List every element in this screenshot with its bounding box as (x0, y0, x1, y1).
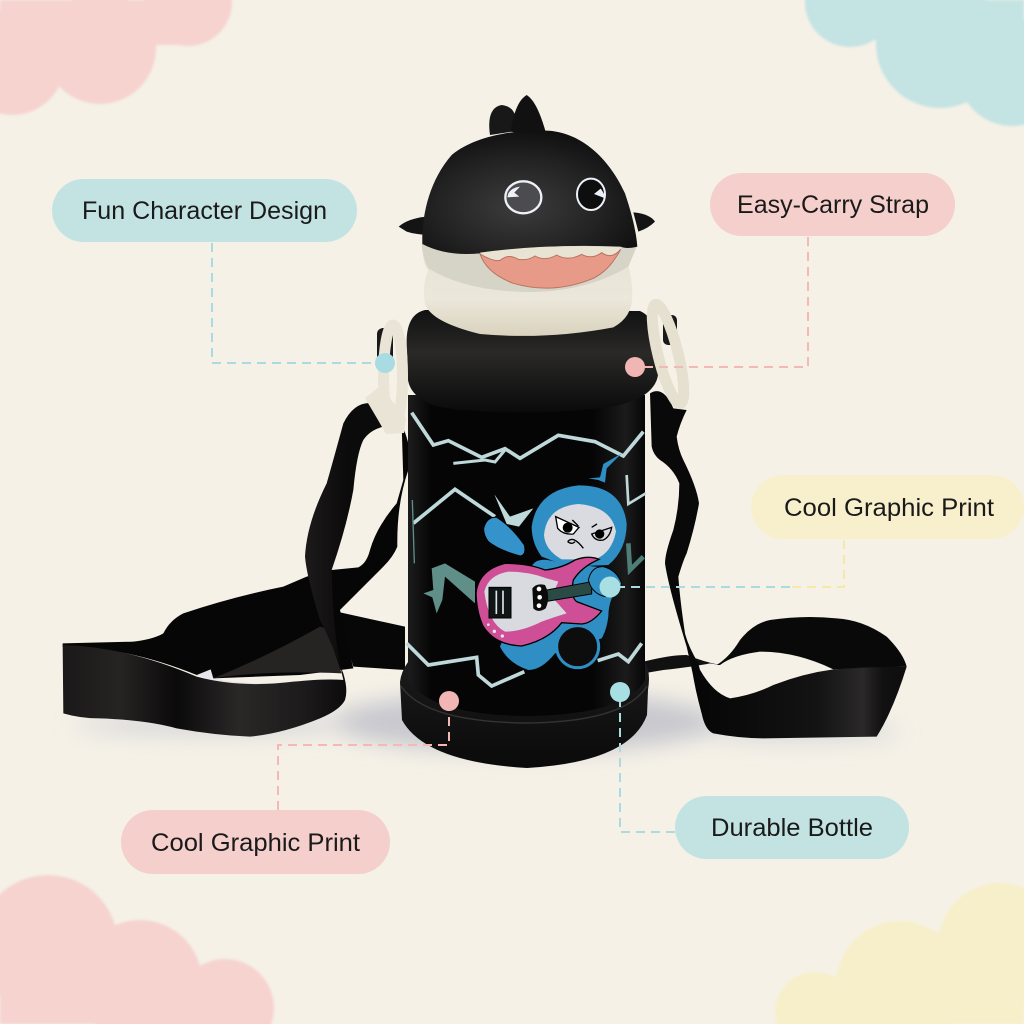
bottle body (401, 395, 647, 723)
face features (556, 517, 612, 548)
collar (407, 310, 659, 412)
jaw shade (422, 244, 637, 292)
right strap (643, 391, 907, 738)
left strap ring (365, 325, 406, 434)
cloud: top left (0, 0, 232, 115)
shark lid (399, 95, 655, 336)
foot ring (557, 626, 599, 668)
right strap ring (646, 302, 690, 406)
connector: easy-carry strap (635, 237, 808, 367)
mouth (480, 246, 621, 288)
blue arm (484, 517, 525, 556)
connector: cool graphic print left (278, 701, 449, 810)
callout: easy-carry strap (710, 173, 955, 236)
guitar (476, 557, 602, 646)
dome (422, 131, 637, 254)
small blue spark (588, 453, 622, 483)
callout: cool graphic print left: Cool Graphic Print (151, 829, 360, 857)
callout: easy-carry strap: Easy-Carry Strap (737, 191, 929, 219)
ground shadow (75, 692, 900, 752)
callout: fun character design: Fun Character Design (82, 197, 327, 225)
blue hood (532, 485, 627, 567)
lightning bolts (407, 413, 646, 686)
cream neck (422, 244, 637, 336)
hand (588, 567, 622, 597)
callout: fun character design (52, 179, 357, 242)
left eye (505, 181, 541, 213)
right eye (577, 179, 605, 210)
left strap (63, 403, 410, 737)
callout: cool graphic print right (751, 475, 1024, 539)
connector: fun character design (212, 243, 385, 363)
cloud: top right (805, 0, 1024, 126)
connector: cool graphic print right (610, 540, 844, 587)
face (544, 504, 616, 559)
marker dots (375, 353, 645, 711)
connector: durable bottle (620, 692, 675, 832)
cloud: bottom right (775, 883, 1024, 1024)
callout: cool graphic print right: Cool Graphic Print (784, 494, 994, 522)
fins and horns (399, 217, 433, 235)
callout: durable bottle (675, 796, 909, 859)
bottle base (400, 662, 649, 768)
callout: cool graphic print left (121, 810, 390, 874)
bottle print: lightning and guitar character (407, 413, 646, 686)
callout: durable bottle: Durable Bottle (711, 814, 873, 842)
cloud: bottom left (0, 875, 274, 1024)
blue body (500, 560, 622, 670)
